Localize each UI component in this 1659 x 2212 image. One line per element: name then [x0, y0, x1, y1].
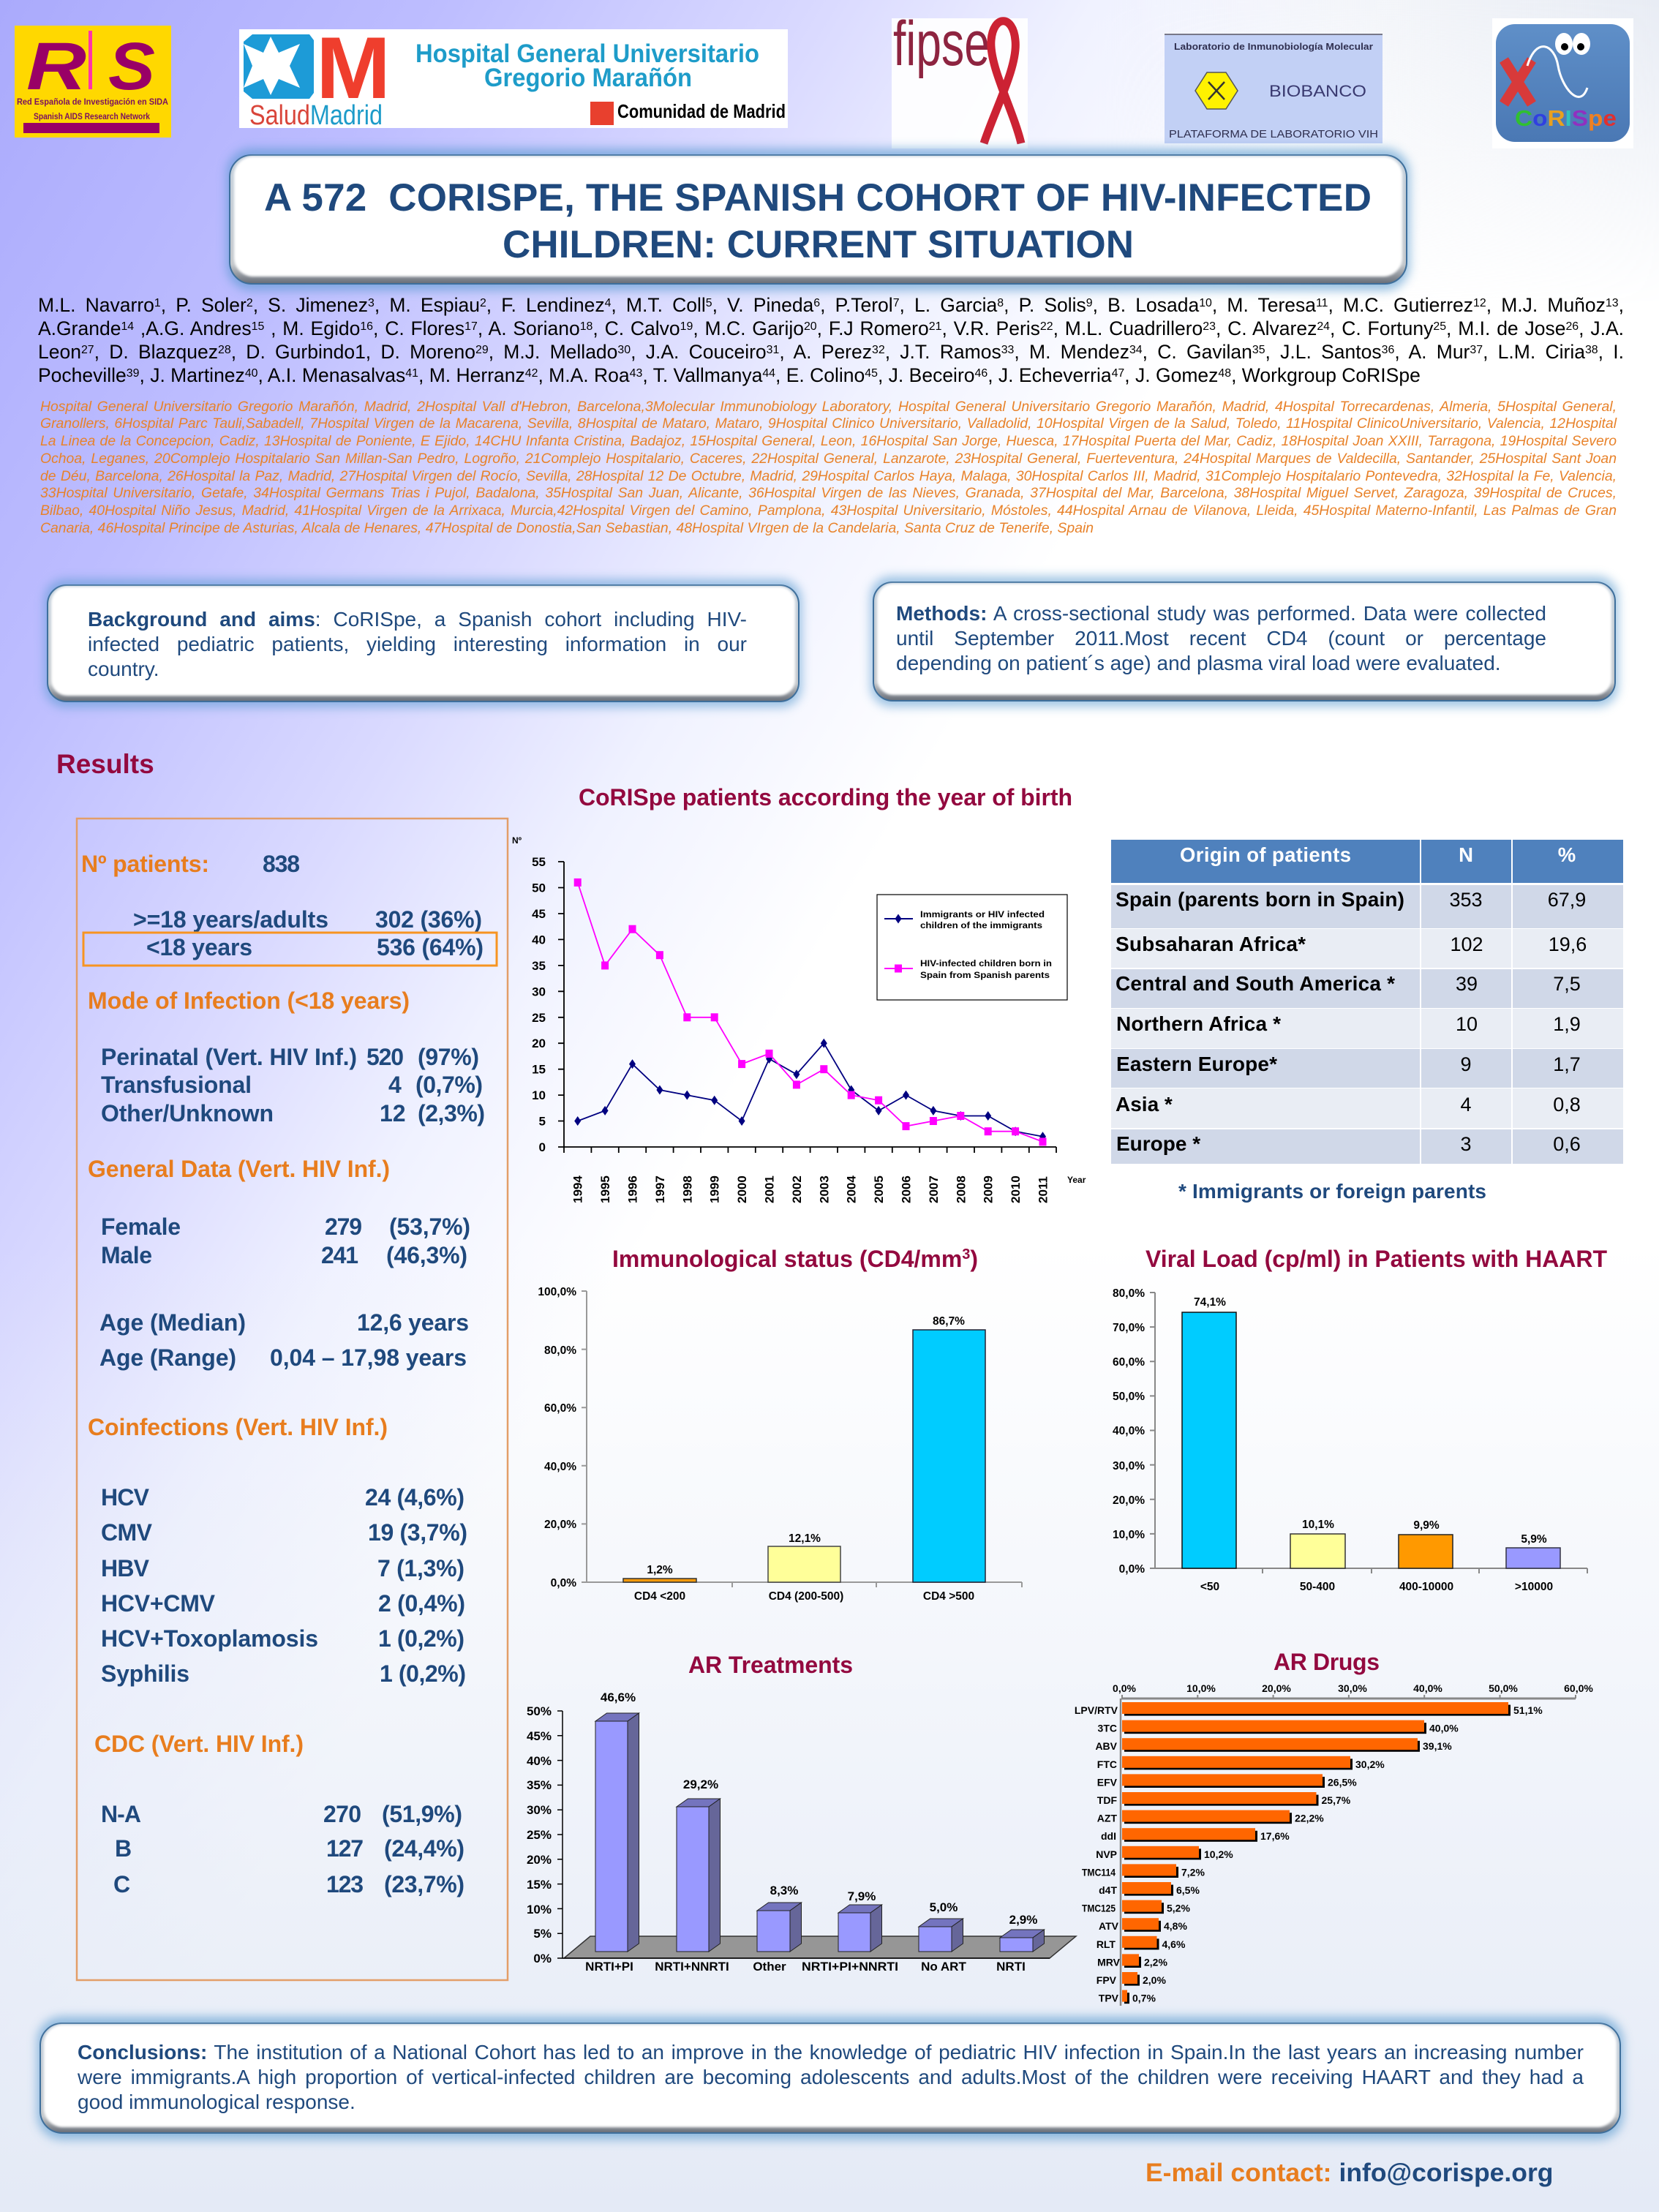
- heading: AR drugs: AR Drugs: [1274, 1649, 1380, 1675]
- bar chart: CD4: 12,1%: [789, 1532, 821, 1545]
- text: background and aims: [88, 607, 747, 680]
- 3D bar chart: AR treatments: 35%: [527, 1778, 552, 1792]
- mode of infection: 12: [380, 1100, 406, 1126]
- authors: Leon27, D. Blazquez28, D. Gurbindo1, D. Moreno29, M.J. Mellado30, J.A. Couceiro31, A. Perez32, J.T. Ramos33, M. Mendez34, C. Gavilan35, J.L. Santos36, A. Mur37, L.M. Ciria38, I.: [38, 341, 1624, 363]
- coinfections: HBV: [101, 1555, 150, 1581]
- heading: immunological status: Immunological status (CD4/mm: [612, 1246, 962, 1272]
- line chart: patients by year of birth: 5: [539, 1115, 546, 1128]
- email contact: E-mail contact: info@corispe.org: [1146, 2158, 1553, 2187]
- affiliations: 33Hospital Universitario, Getafe, 34Hospital Germans Trias i Pujol, Badalona, 35Hospital San Juan, Alicante, 36Hospital Virgen de las Nieves, Granada, 37Hospital del Mar, Barcelona, 38Hospital Miguel Servet, Zaragoza, 39Hospital de Cruces,: [40, 485, 1617, 501]
- horizontal bar chart: AR drugs: 25,7%: [1321, 1794, 1351, 1806]
- text: background and aims: Background and aims: CoRISpe, a Spanish cohort including HIV-: [88, 607, 747, 631]
- line chart: patients by year of birth: 15: [532, 1063, 546, 1077]
- horizontal bar chart: AR drugs: RLT: [1096, 1938, 1116, 1950]
- coinfections: 24 (4,6%): [365, 1484, 464, 1511]
- mode of infection: Perinatal (Vert. HIV Inf.): [101, 1044, 357, 1070]
- horizontal bar chart: AR drugs: 2,0%: [1143, 1974, 1166, 1986]
- text: methods: Methods: A cross-sectional study was performed. Data were collected: [896, 601, 1546, 625]
- CDC: 127: [326, 1835, 364, 1862]
- number of patients: 838: [263, 851, 300, 877]
- horizontal bar chart: AR drugs: EFV: [1097, 1776, 1118, 1788]
- general data: 12,6 years: [357, 1309, 469, 1336]
- horizontal bar chart: AR drugs: 3TC: [1098, 1723, 1117, 1734]
- table: origin of patients: 67,9: [1548, 889, 1586, 911]
- line chart: patients by year of birth: 2010: [1009, 1175, 1023, 1203]
- table: origin of patients: 10: [1456, 1013, 1478, 1035]
- bar chart: viral load: <50: [1200, 1581, 1219, 1593]
- horizontal bar chart: AR drugs: 20,0%: [1262, 1682, 1291, 1694]
- mode of infection: (97%): [418, 1044, 479, 1070]
- horizontal bar chart: AR drugs: d4T: [1099, 1884, 1117, 1896]
- 3D bar chart: AR treatments: Other: [753, 1960, 786, 1974]
- line chart: patients by year of birth: 1995: [598, 1175, 612, 1203]
- legend: Immigrants or HIV infected: [920, 909, 1045, 919]
- line chart: patients by year of birth: 2000: [735, 1175, 749, 1203]
- general data: Age (Range): [99, 1344, 236, 1371]
- coinfections: 1 (0,2%): [380, 1660, 466, 1687]
- CDC: C: [113, 1871, 130, 1897]
- logo: Hospital Gregorio Marañón / SaludMadrid: Comunidad de Madrid: [617, 100, 786, 122]
- bar chart: CD4: 20,0%: [544, 1519, 576, 1531]
- table: origin of patients: 0,6: [1553, 1133, 1581, 1155]
- number of patients: 536 (64%): [377, 934, 484, 960]
- table: origin of patients: [1111, 840, 1623, 1203]
- line chart: patients by year of birth: 2003: [817, 1175, 831, 1203]
- CDC: 123: [326, 1871, 364, 1897]
- bar chart: viral load: 60,0%: [1113, 1356, 1145, 1369]
- bar chart: CD4: CD4 >500: [923, 1590, 974, 1603]
- logo: RIS: Spanish AIDS Research Network: [34, 111, 150, 121]
- heading: AR treatments: AR Treatments: [688, 1652, 853, 1678]
- bar chart: viral load: 74,1%: [1194, 1296, 1226, 1309]
- line chart: patients by year of birth: 35: [532, 959, 546, 973]
- logo: Biobanco: BIOBANCO: [1269, 82, 1366, 100]
- table: origin of patients: 353: [1449, 889, 1483, 911]
- bar chart: viral load: >10000: [1515, 1581, 1553, 1593]
- bar chart: CD4: CD4 (200-500): [769, 1590, 843, 1603]
- line chart: patients by year of birth: 2009: [982, 1175, 996, 1203]
- logo: RIS: [15, 26, 171, 138]
- table: origin of patients: Europe *: [1116, 1132, 1200, 1155]
- affiliations: de Déu, Barcelona, 26Hospital la Paz, Madrid, 27Hospital Virgen del Rocío, Sevilla, 28Hospital 12 De Octubre, Madrid, 29Hospital Carlos Haya, Malaga, 30Hospital Carlos III, Madrid, 31Complejo Hospitalario Pontevedra, 32Hospital la Fe, Valencia,: [40, 468, 1617, 484]
- text: methods: [896, 601, 1546, 674]
- authors: M.L. Navarro1, P. Soler2, S. Jimenez3, M. Espiau2, F. Lendinez4, M.T. Coll5, V. Pineda6, P.Terol7, L. Garcia8, P. Solis9, B. Losada10, M. Teresa11, M.C. Gutierrez12, M.J. Muñoz13,: [38, 294, 1624, 316]
- 3D bar chart: AR treatments: 5%: [533, 1927, 552, 1941]
- coinfections: HCV+CMV: [101, 1590, 216, 1617]
- coinfections: Coinfections (Vert. HIV Inf.): [88, 1414, 388, 1440]
- horizontal bar chart: AR drugs: 40,0%: [1429, 1723, 1459, 1734]
- text: conclusions: good immunological response.: [78, 2091, 356, 2113]
- horizontal bar chart: AR drugs: 4,8%: [1164, 1920, 1187, 1932]
- 3D bar chart: AR treatments: 7,9%: [848, 1889, 876, 1903]
- coinfections: 19 (3,7%): [368, 1519, 467, 1546]
- legend: children of the immigrants: [920, 920, 1042, 930]
- series: Spanish parents: [574, 879, 1046, 1146]
- bar chart: viral load: 0,0%: [1119, 1563, 1145, 1576]
- CDC: 270: [323, 1801, 361, 1827]
- general data: General Data (Vert. HIV Inf.): [88, 1156, 390, 1182]
- heading: immunological status: ): [970, 1246, 978, 1272]
- table: origin of patients: Subsaharan Africa*: [1116, 933, 1306, 955]
- horizontal bar chart: AR drugs: AZT: [1097, 1813, 1117, 1824]
- line chart: patients by year of birth: 1999: [708, 1175, 722, 1203]
- 3D bar chart: AR treatments: 50%: [527, 1704, 552, 1718]
- 3D bar chart: AR treatments: 30%: [527, 1803, 552, 1817]
- table: origin of patients: 39: [1456, 973, 1478, 995]
- logo: Biobanco: PLATAFORMA DE LABORATORIO VIH: [1169, 128, 1378, 140]
- bar chart: CD4: 40,0%: [544, 1461, 576, 1473]
- 3D bar chart: AR treatments: 45%: [527, 1729, 552, 1743]
- table: origin of patients: Origin of patients: [1180, 843, 1351, 866]
- CDC: (51,9%): [382, 1801, 462, 1827]
- bar chart: CD4: 1,2%: [647, 1564, 673, 1576]
- mode of infection: Transfusional: [101, 1072, 252, 1098]
- logo: Hospital Gregorio Marañón / SaludMadrid: Hospital General Universitario: [415, 40, 759, 68]
- affiliations: [40, 398, 1617, 536]
- table footnote: * Immigrants or foreign parents: [1178, 1180, 1486, 1203]
- table: origin of patients: 3: [1460, 1133, 1472, 1155]
- 3D bar chart: AR treatments: NRTI+NNRTI: [655, 1960, 729, 1974]
- general data: Male: [101, 1242, 152, 1268]
- line chart: patients by year of birth: 20: [532, 1037, 546, 1050]
- horizontal bar chart: AR drugs: 17,6%: [1260, 1830, 1290, 1842]
- number of patients: Nº patients:: [81, 851, 209, 877]
- 3D bar chart: AR treatments: 20%: [527, 1853, 552, 1867]
- logo: RIS: R: [26, 29, 86, 104]
- horizontal bar chart: AR drugs: 5,2%: [1167, 1903, 1190, 1914]
- horizontal bar chart: AR drugs: 40,0%: [1413, 1682, 1442, 1694]
- number of patients: 302 (36%): [375, 906, 482, 933]
- text: conclusions: were immigrants.A high proportion of vertical-infected children are becoming adolescents and adults.Most of the children were receiving HAART and they had a: [78, 2066, 1584, 2088]
- table: origin of patients: 19,6: [1549, 933, 1587, 955]
- number of patients: <18 years: [146, 934, 252, 960]
- line chart: patients by year of birth: 0: [539, 1140, 546, 1154]
- title box: CHILDREN: CURRENT SITUATION: [503, 223, 1134, 266]
- title box: [227, 148, 1410, 290]
- table: origin of patients: Northern Africa *: [1116, 1012, 1281, 1035]
- horizontal bar chart: AR drugs: 10,2%: [1204, 1848, 1233, 1860]
- line chart: patients by year of birth: 2011: [1036, 1176, 1050, 1203]
- line chart: patients by year of birth: 2006: [900, 1175, 913, 1203]
- bar chart: CD4: CD4 <200: [634, 1590, 685, 1603]
- line chart: patients by year of birth: 2004: [845, 1175, 859, 1203]
- heading: immunological status: 3: [962, 1246, 970, 1263]
- line chart: patients by year of birth: Nº: [512, 835, 522, 846]
- general data: (53,7%): [389, 1214, 470, 1240]
- authors: A.Grande14 ,A.G. Andres15 , M. Egido16, C. Flores17, A. Soriano18, C. Calvo19, M.C. Garijo20, F.J Romero21, V.R. Peris22, M.L. Cuadrillero23, C. Alvarez24, C. Fortuny25, M.I. de Jose26, J.A.: [38, 317, 1624, 339]
- 3D bar chart: AR treatments: 0%: [533, 1952, 552, 1965]
- horizontal bar chart: AR drugs: 0,0%: [1113, 1682, 1137, 1694]
- coinfections: CMV: [101, 1519, 153, 1546]
- table: origin of patients: %: [1558, 843, 1576, 866]
- horizontal bar chart: AR drugs: 26,5%: [1328, 1776, 1357, 1788]
- bar chart: CD4: 80,0%: [544, 1344, 576, 1357]
- bar chart: CD4: 100,0%: [538, 1286, 576, 1298]
- bar chart: viral load: 400-10000: [1399, 1581, 1453, 1593]
- CDC: [94, 1731, 464, 1897]
- line chart: patients by year of birth: 1994: [571, 1175, 585, 1203]
- line chart: patients by year of birth: [512, 835, 1086, 1203]
- mode of infection: (0,7%): [415, 1072, 483, 1098]
- number of patients: [81, 851, 497, 966]
- table: origin of patients: Spain (parents born in Spain): [1116, 888, 1404, 911]
- affiliations: Granollers, 6Hospital Parc Tauli,Sabadell, 7Hospital Virgen de la Macarena, Sevilla, 8Hospital de Mataro, Mataro, 9Hospital Clinico Universitario, Valladolid, 10Hospital Virgen de la Salud, Toledo, 11Hospital ClinicoUniversitario, Valencia, 12Hospital: [40, 415, 1617, 432]
- line chart: patients by year of birth: 1996: [626, 1175, 639, 1203]
- coinfections: HCV+Toxoplamosis: [101, 1625, 318, 1652]
- line chart: patients by year of birth: 30: [532, 985, 546, 998]
- 3D bar chart: AR treatments: 10%: [527, 1903, 552, 1916]
- line chart: patients by year of birth: 2002: [790, 1175, 804, 1203]
- general data: 279: [325, 1214, 362, 1240]
- bar chart: viral load: 40,0%: [1113, 1425, 1145, 1437]
- bar chart: viral load: [1113, 1287, 1587, 1593]
- horizontal bar chart: AR drugs: 51,1%: [1513, 1704, 1543, 1716]
- horizontal bar chart: AR drugs: TDF: [1097, 1794, 1117, 1806]
- line chart: patients by year of birth: 1998: [680, 1175, 694, 1203]
- CDC: B: [115, 1835, 132, 1862]
- legend: Spain from Spanish parents: [920, 970, 1050, 980]
- general data: [88, 1156, 470, 1371]
- bar chart: CD4: [538, 1286, 1022, 1603]
- line chart: patients by year of birth: 50: [532, 881, 546, 895]
- horizontal bar chart: AR drugs: NVP: [1096, 1848, 1117, 1860]
- logo: RIS: Red Española de Investigación en SIDA: [17, 97, 168, 107]
- horizontal bar chart: AR drugs: 22,2%: [1295, 1813, 1324, 1824]
- horizontal bar chart: AR drugs: TPV: [1099, 1993, 1119, 2004]
- 3D bar chart: AR treatments: [527, 1690, 1076, 1974]
- coinfections: HCV: [101, 1484, 150, 1511]
- table: origin of patients: Asia *: [1116, 1093, 1173, 1116]
- bar chart: viral load: 9,9%: [1413, 1519, 1440, 1532]
- coinfections: [88, 1414, 467, 1687]
- CDC: (24,4%): [384, 1835, 464, 1862]
- horizontal bar chart: AR drugs: ABV: [1095, 1740, 1118, 1752]
- CDC: N-A: [101, 1801, 141, 1827]
- general data: Female: [101, 1214, 181, 1240]
- logo: fipse ribbon: [892, 9, 1028, 148]
- 3D bar chart: AR treatments: 8,3%: [770, 1884, 798, 1897]
- horizontal bar chart: AR drugs: 10,0%: [1186, 1682, 1216, 1694]
- table: origin of patients: 102: [1450, 933, 1483, 955]
- horizontal bar chart: AR drugs: 30,0%: [1338, 1682, 1367, 1694]
- heading: results: Results: [56, 749, 154, 779]
- bar chart: CD4: 60,0%: [544, 1402, 576, 1415]
- general data: Age (Median): [99, 1309, 246, 1336]
- logo: Hospital Gregorio Marañón / SaludMadrid: SaludMadrid: [249, 100, 383, 131]
- 3D bar chart: AR treatments: No ART: [921, 1960, 966, 1974]
- table: origin of patients: 9: [1460, 1053, 1472, 1075]
- authors: Pocheville39, J. Martinez40, A.I. Menasalvas41, M. Herranz42, M.A. Roa43, T. Vallmanya44, E. Colino45, J. Beceiro46, J. Echeverria47, J. Gomez48, Workgroup CoRISpe: [38, 364, 1421, 386]
- coinfections: 1 (0,2%): [378, 1625, 464, 1652]
- coinfections: 7 (1,3%): [377, 1555, 464, 1581]
- horizontal bar chart: AR drugs: ddI: [1101, 1830, 1116, 1842]
- 3D bar chart: AR treatments: 5,0%: [930, 1900, 958, 1914]
- conclusions box: [37, 2017, 1623, 2140]
- line chart: patients by year of birth: 25: [532, 1011, 546, 1025]
- horizontal bar chart: AR drugs: ATV: [1099, 1920, 1119, 1932]
- logo: CoRISpe: [1492, 18, 1633, 148]
- mode of infection: 4: [388, 1072, 402, 1098]
- general data: 241: [321, 1242, 358, 1268]
- coinfections: Syphilis: [101, 1660, 189, 1687]
- heading: year of birth chart: CoRISpe patients according the year of birth: [579, 784, 1072, 810]
- horizontal bar chart: AR drugs: TMC114: [1082, 1866, 1116, 1878]
- 3D bar chart: AR treatments: NRTI+PI: [585, 1960, 633, 1974]
- affiliations: La Linea de la Concepcion, Cadiz, 13Hospital de Poniente, E Ejido, 14CHU Infanta Cristina, Badajoz, 15Hospital General, Leon, 16Hospital San Jorge, Huesca, 17Hospital Puerta del Mar, Cadiz, 18Hospital Joan XXIII, Tarragona, 19Hospital Severo: [40, 433, 1617, 449]
- mode of infection: (2,3%): [418, 1100, 485, 1126]
- 3D bar chart: AR treatments: NRTI: [996, 1960, 1026, 1974]
- affiliations: Ochoa, Leganes, 20Complejo Hospitalario San Millan-San Pedro, Logroño, 21Complejo Hospitalario, Caceres, 22Hospital General, Lanzarote, 23Hospital General, Fuerteventura, 24Hospital Marques de Valdecilla, Santander, 25Hospital Sant Joan: [40, 451, 1617, 467]
- horizontal bar chart: AR drugs: 30,2%: [1355, 1758, 1385, 1770]
- table: origin of patients: N: [1459, 843, 1473, 866]
- bar chart: viral load: 50,0%: [1113, 1391, 1145, 1403]
- logo: Biobanco: Laboratorio de Inmunobiología Molecular: [1174, 41, 1373, 52]
- line chart: patients by year of birth: Year: [1067, 1175, 1086, 1185]
- line chart: patients by year of birth: 55: [532, 855, 546, 869]
- methods box: [870, 576, 1618, 707]
- table: origin of patients: Eastern Europe*: [1116, 1053, 1277, 1075]
- bar chart: viral load: 5,9%: [1521, 1533, 1547, 1546]
- 3D bar chart: AR treatments: 25%: [527, 1828, 552, 1842]
- title box: A 572 CORISPE, THE SPANISH COHORT OF HIV-INFECTED: [264, 176, 1372, 219]
- affiliations: Bilbao, 40Hospital Niño Jesus, Madrid, 41Hospital Virgen de la Arrixaca, Murcia,42Hospital Virgen del Camino, Pamplona, 43Hospital Universitario, Móstoles, 44Hospital Arnau de Vilanova, Lleida, 45Hospital Materno-Infantil, Las Palmas de Gran: [40, 503, 1617, 519]
- logo: Hospital Gregorio Marañón / SaludMadrid: [239, 19, 788, 131]
- number of patients: >=18 years/adults: [133, 906, 328, 933]
- table: origin of patients: Central and South America *: [1116, 972, 1395, 995]
- logo: Hospital Gregorio Marañón / SaludMadrid: Gregorio Marañón: [484, 64, 692, 92]
- background and aims box: [45, 579, 802, 707]
- line chart: patients by year of birth: 2005: [872, 1175, 886, 1203]
- horizontal bar chart: AR drugs: [1075, 1682, 1593, 2006]
- mode of infection: 520: [366, 1044, 404, 1070]
- logo: RIS: S: [108, 29, 155, 104]
- heading: viral load: Viral Load (cp/ml) in Patients with HAART: [1146, 1246, 1607, 1272]
- bar chart: viral load: 50-400: [1300, 1581, 1335, 1593]
- horizontal bar chart: AR drugs: TMC125: [1082, 1903, 1116, 1914]
- table: origin of patients: 0,8: [1553, 1094, 1581, 1116]
- table: origin of patients: 4: [1460, 1094, 1472, 1116]
- line chart: patients by year of birth: 2008: [954, 1175, 968, 1203]
- horizontal bar chart: AR drugs: 7,2%: [1181, 1866, 1205, 1878]
- logo: CoRISpe: CoRISpe: [1515, 105, 1617, 131]
- horizontal bar chart: AR drugs: LPV/RTV: [1075, 1704, 1118, 1716]
- text: methods: depending on patient´s age) and plasma viral load were evaluated.: [896, 651, 1501, 674]
- table: origin of patients: 7,5: [1553, 973, 1581, 995]
- mode of infection: [88, 988, 485, 1126]
- mode of infection: Mode of Infection (<18 years): [88, 988, 410, 1014]
- line chart: patients by year of birth: 1997: [653, 1175, 667, 1203]
- logo: fipse ribbon: fipse: [893, 9, 990, 79]
- CDC: CDC (Vert. HIV Inf.): [94, 1731, 304, 1757]
- horizontal bar chart: AR drugs: 2,2%: [1144, 1956, 1167, 1968]
- affiliations: Hospital General Universitario Gregorio Marañón, Madrid, 2Hospital Vall d'Hebron, Barcelona,3Molecular Immunobiology Laboratory, Hospital General Universitario Gregorio Marañón, Madrid, 4Hospital Torrecardenas, Almeria, 5Hospital General,: [40, 398, 1617, 414]
- coinfections: 2 (0,4%): [378, 1590, 465, 1617]
- general data: (46,3%): [386, 1242, 467, 1268]
- line chart: patients by year of birth: 2001: [762, 1175, 777, 1203]
- bar chart: CD4: 86,7%: [933, 1315, 965, 1328]
- text: conclusions: Conclusions: The institution of a National Cohort has led to an improve in the knowledge of pediatric HIV infection in Spain.In the last years an increasing number: [78, 2041, 1584, 2063]
- bar chart: viral load: 80,0%: [1113, 1287, 1145, 1300]
- bar chart: viral load: 30,0%: [1113, 1460, 1145, 1472]
- series: immigrants: [574, 1039, 1046, 1141]
- logo: Biobanco: [1165, 34, 1382, 143]
- horizontal bar chart: AR drugs: 4,6%: [1162, 1938, 1186, 1950]
- mode of infection: Other/Unknown: [101, 1100, 274, 1126]
- 3D bar chart: AR treatments: 29,2%: [683, 1778, 718, 1791]
- line chart: patients by year of birth: 2007: [927, 1175, 941, 1203]
- 3D bar chart: AR treatments: 40%: [527, 1754, 552, 1768]
- horizontal bar chart: AR drugs: FPV: [1096, 1974, 1117, 1986]
- horizontal bar chart: AR drugs: 39,1%: [1423, 1740, 1452, 1752]
- logo: Hospital Gregorio Marañón / SaludMadrid: M: [316, 19, 391, 117]
- bar chart: viral load: 20,0%: [1113, 1494, 1145, 1507]
- table: origin of patients: 1,7: [1553, 1053, 1581, 1075]
- affiliations: Canaria, 46Hospital Principe de Asturias, Alcala de Henares, 47Hospital de Donostia,San Sebastian, 48Hospital VIrgen de la Candelaria, Santa Cruz de Tenerife, Spain: [40, 520, 1094, 536]
- text: background and aims: infected pediatric patients, yielding interesting information in our: [88, 632, 747, 655]
- text: methods: until September 2011.Most recent CD4 (count or percentage: [896, 626, 1546, 650]
- horizontal bar chart: AR drugs: MRV: [1097, 1956, 1121, 1968]
- line chart: patients by year of birth: 10: [532, 1088, 546, 1102]
- legend: [877, 895, 1067, 1000]
- horizontal bar chart: AR drugs: 50,0%: [1489, 1682, 1518, 1694]
- horizontal bar chart: AR drugs: 0,7%: [1132, 1993, 1156, 2004]
- bar chart: viral load: 10,1%: [1302, 1519, 1334, 1531]
- line chart: patients by year of birth: 45: [532, 907, 546, 921]
- 3D bar chart: AR treatments: 2,9%: [1009, 1913, 1037, 1927]
- 3D bar chart: AR treatments: 15%: [527, 1878, 552, 1892]
- CDC: (23,7%): [384, 1871, 464, 1897]
- bar chart: viral load: 70,0%: [1113, 1322, 1145, 1334]
- 3D bar chart: AR treatments: NRTI+PI+NNRTI: [802, 1960, 898, 1974]
- bar chart: viral load: 10,0%: [1113, 1529, 1145, 1541]
- legend: HIV-infected children born in: [920, 958, 1052, 968]
- text: conclusions: [78, 2041, 1584, 2113]
- general data: 0,04 – 17,98 years: [270, 1344, 467, 1371]
- bar chart: CD4: 0,0%: [551, 1577, 576, 1590]
- text: background and aims: country.: [88, 657, 159, 680]
- horizontal bar chart: AR drugs: FTC: [1097, 1758, 1117, 1770]
- table: origin of patients: 1,9: [1553, 1013, 1581, 1035]
- horizontal bar chart: AR drugs: 6,5%: [1176, 1884, 1200, 1896]
- 3D bar chart: AR treatments: 46,6%: [601, 1690, 636, 1704]
- panel: patient data: [77, 819, 508, 1980]
- horizontal bar chart: AR drugs: 60,0%: [1564, 1682, 1593, 1694]
- line chart: patients by year of birth: 40: [532, 933, 546, 947]
- authors: [38, 294, 1624, 386]
